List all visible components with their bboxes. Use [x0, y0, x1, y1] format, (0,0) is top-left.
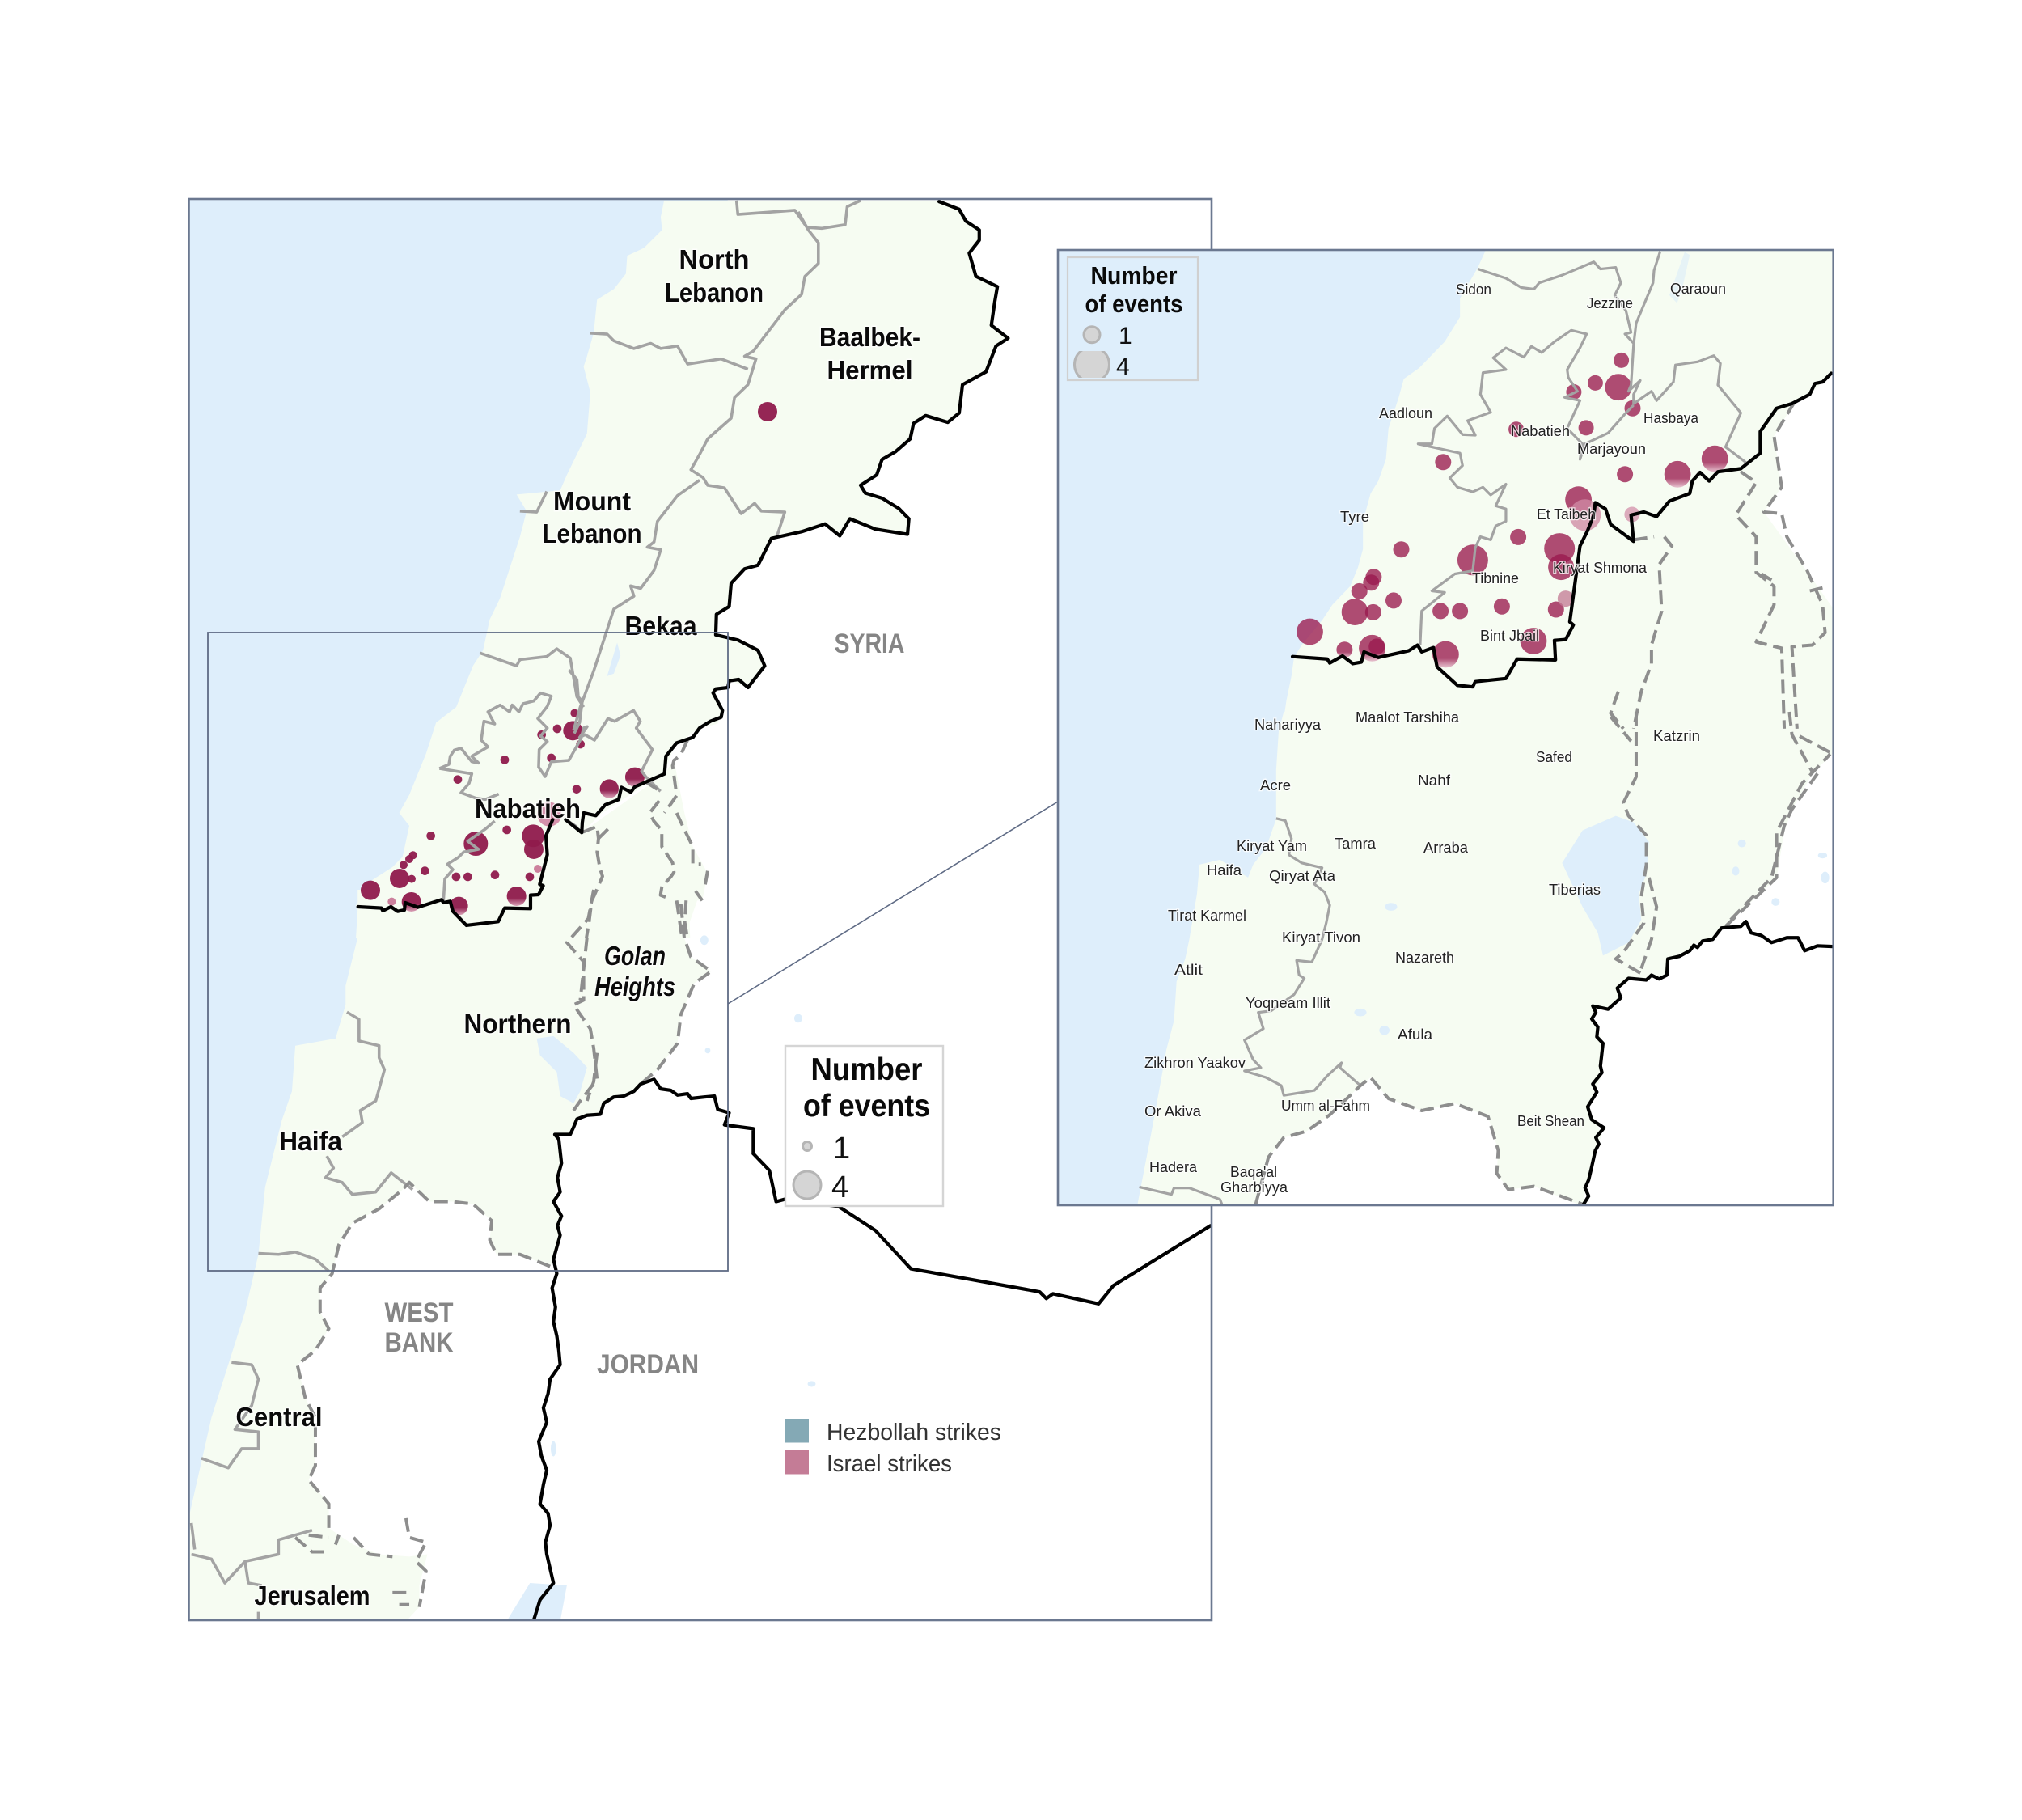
town labels: inset map: Yoqneam Illit [1246, 995, 1330, 1011]
region and country labels: main map: Hermel [827, 355, 912, 385]
town labels: inset map: Hasbaya [1643, 410, 1699, 426]
legend: strike colours: Hezbollah strikes [827, 1420, 1001, 1445]
town labels: inset map: Et Taibeh [1537, 506, 1596, 523]
region and country labels: main map [236, 244, 920, 1610]
town labels: inset map: Sidon [1456, 281, 1491, 298]
international borders (inset) [1292, 373, 1833, 1206]
region and country labels: main map: Golan [604, 941, 666, 971]
region and country labels: main map: Bekaa [624, 611, 697, 641]
town labels: inset map: Tiberias [1549, 882, 1601, 898]
town labels: inset map: Nahf [1418, 772, 1451, 789]
town labels: inset map: Umm al-Fahm [1281, 1098, 1370, 1114]
town labels: inset map: Qiryat Ata [1269, 868, 1336, 884]
region and country labels: main map: Northern [464, 1009, 571, 1039]
region and country labels: main map: BANK [385, 1327, 454, 1358]
legend: number of events, inset: Number [1090, 261, 1178, 290]
disputed boundaries (inset) [1256, 402, 1830, 1204]
region and country labels: main map: Haifa [279, 1126, 343, 1156]
region and country labels: main map: Lebanon [542, 518, 642, 548]
town labels: inset map: Kiryat Yam [1237, 838, 1307, 854]
town labels: inset map: Tamra [1335, 836, 1377, 852]
town labels: inset map: Nazareth [1395, 950, 1454, 966]
legend: number of events, inset [1068, 257, 1198, 382]
region and country labels: main map: Jerusalem [254, 1581, 370, 1610]
town labels: inset map: Kiryat Tivon [1282, 929, 1360, 946]
legend: number of events, inset: 4 [1116, 353, 1130, 380]
town labels: inset map: Hadera [1149, 1159, 1198, 1175]
region and country labels: main map: WEST [385, 1297, 454, 1328]
town labels: inset map: Qaraoun [1670, 281, 1726, 297]
town labels: inset map: Katzrin [1653, 728, 1700, 744]
town labels: inset map: Or Akiva [1144, 1103, 1202, 1120]
region and country labels: main map: Baalbek- [819, 322, 920, 352]
region and country labels: main map: Mount [553, 486, 631, 516]
legend: number of events, main map: Number [810, 1052, 922, 1087]
legend: strike colours: Israel strikes [827, 1451, 952, 1477]
panel: main map of Lebanon and northern Israel [188, 199, 1212, 1621]
international borders [358, 201, 1211, 1621]
region and country labels: main map: Nabatieh [475, 794, 581, 823]
town labels: inset map: Bint Jbail [1480, 628, 1539, 644]
panel: inset zoom map [1058, 250, 1835, 1206]
town labels: inset map: Tyre [1340, 509, 1369, 525]
town labels: inset map: Atlit [1174, 962, 1203, 978]
legend: number of events, main map: 1 [833, 1132, 850, 1166]
town labels: inset map: Zikhron Yaakov [1144, 1055, 1246, 1071]
town labels: inset map: Nahariyya [1254, 717, 1322, 733]
region and country labels: main map: Heights [594, 971, 675, 1001]
town labels: inset map: Haifa [1207, 862, 1242, 878]
legend: number of events, main map: of events [803, 1089, 930, 1124]
town labels: inset map: Jezzine [1587, 295, 1633, 311]
region and country labels: main map: North [679, 244, 749, 274]
town labels: inset map: Beit Shean [1517, 1113, 1584, 1129]
town labels: inset map: Tibnine [1472, 570, 1519, 586]
town labels: inset map: Maalot Tarshiha [1356, 709, 1460, 726]
town labels: inset map: Aadloun [1379, 405, 1432, 421]
town labels: inset map [1144, 281, 1726, 1196]
town labels: inset map: Tirat Karmel [1168, 908, 1246, 924]
event circles: main map [361, 402, 777, 915]
connector line between extent and inset [728, 802, 1058, 1004]
zoom extent rectangle [208, 633, 728, 1271]
town labels: inset map: Nabatieh [1511, 423, 1570, 439]
town labels: inset map: Baqa'al [1230, 1164, 1277, 1180]
event circles: inset map [1297, 353, 1728, 667]
town labels: inset map: Gharbiyya [1220, 1179, 1288, 1196]
town labels: inset map: Acre [1260, 777, 1291, 794]
lake: Dead Sea [506, 1583, 567, 1621]
legend: number of events, inset: of events [1085, 290, 1182, 318]
disputed boundaries: Golan Heights and West Bank dashed lines [295, 740, 711, 1607]
lake: Sea of Galilee (inset) [1562, 816, 1649, 955]
inset panel frame [1058, 250, 1834, 1205]
town labels: inset map: Afula [1398, 1026, 1433, 1043]
administrative boundaries (inset) [1140, 252, 1746, 1206]
region and country labels: main map: Central [236, 1402, 322, 1432]
region and country labels: main map: Lebanon [665, 277, 764, 307]
town labels: inset map: Marjayoun [1577, 441, 1646, 457]
lake: Sea of Galilee [537, 1036, 587, 1103]
region and country labels: main map: JORDAN [597, 1349, 699, 1380]
administrative boundaries [192, 201, 861, 1621]
town labels: inset map: Kiryat Shmona [1553, 560, 1648, 576]
legend: number of events, main map: 4 [831, 1170, 848, 1204]
town labels: inset map: Arraba [1423, 840, 1469, 856]
legend: number of events, inset: 1 [1119, 323, 1132, 349]
legend: number of events, main map [785, 1046, 943, 1206]
legend: strike colours [785, 1419, 1001, 1477]
town labels: inset map: Safed [1536, 749, 1572, 765]
region and country labels: main map: SYRIA [835, 629, 904, 659]
main panel frame [189, 199, 1212, 1620]
